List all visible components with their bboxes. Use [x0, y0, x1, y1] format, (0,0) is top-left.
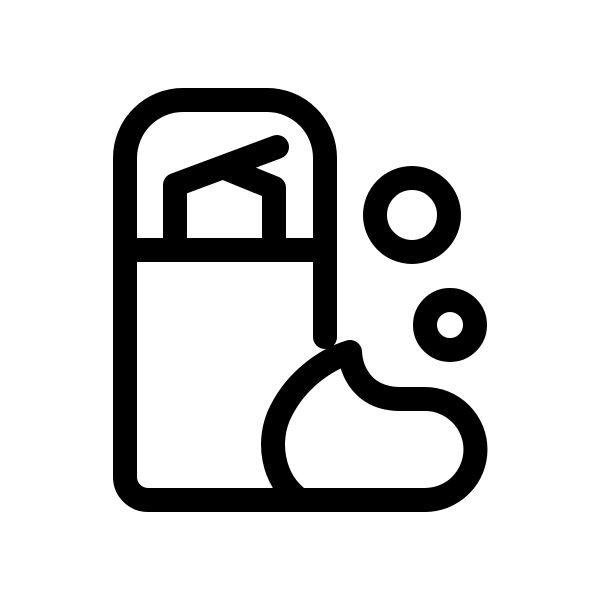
- bubble small: [425, 300, 475, 350]
- can body: [125, 100, 425, 500]
- nozzle: [175, 147, 277, 250]
- foam blob: [273, 352, 475, 500]
- bubble large: [375, 178, 449, 252]
